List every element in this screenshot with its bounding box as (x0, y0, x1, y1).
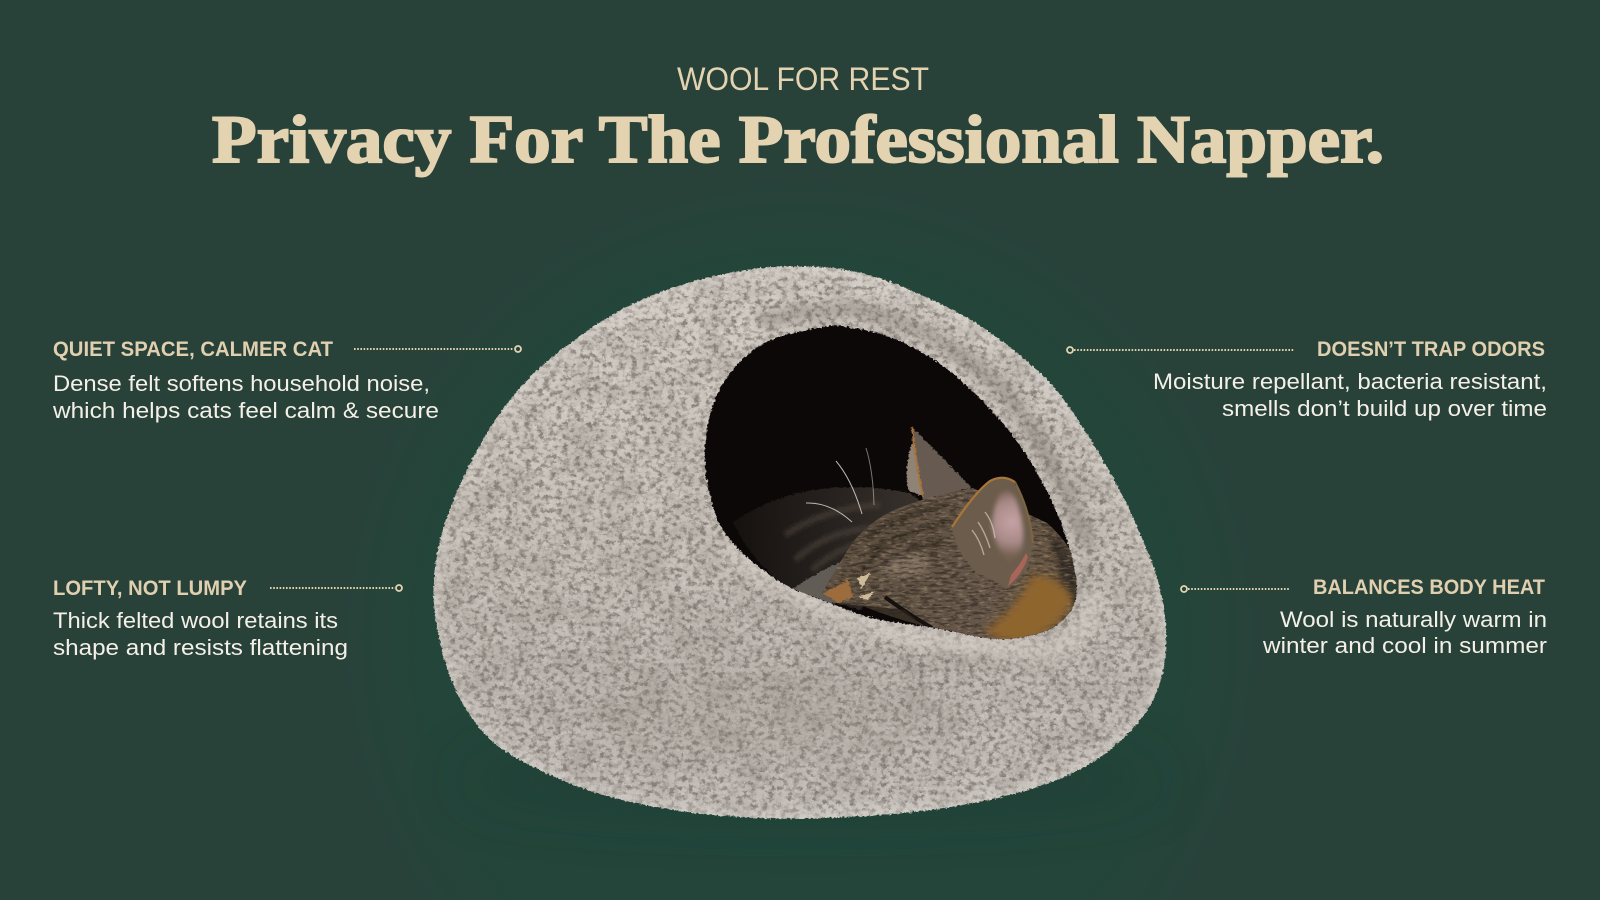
callout heading: DOESN’T TRAP ODORS (1317, 338, 1545, 361)
far ear (907, 427, 972, 500)
callout: body heat (1181, 576, 1547, 658)
heading block (212, 61, 1384, 177)
leader line (354, 346, 521, 352)
callout text (53, 608, 348, 660)
callout: lofty (53, 577, 402, 660)
callout text (52, 371, 439, 423)
callout: quiet space (52, 338, 521, 423)
callout text (1262, 607, 1547, 658)
cave opening (705, 326, 1077, 639)
callout heading: QUIET SPACE, CALMER CAT (53, 338, 333, 361)
callout text: Thick felted wool retains its (53, 608, 338, 633)
felt shell (420, 255, 1180, 830)
callout text: winter and cool in summer (1262, 633, 1547, 658)
eyebrow: WOOL FOR REST (677, 61, 929, 97)
callout text: Wool is naturally warm in (1280, 607, 1547, 632)
callout heading: LOFTY, NOT LUMPY (53, 577, 247, 600)
callout text: shape and resists flattening (53, 635, 348, 660)
cat head and neck (822, 488, 1076, 640)
cat body (733, 486, 920, 610)
callout text: which helps cats feel calm & secure (52, 398, 439, 423)
felt cat cave (420, 255, 1180, 830)
orange neck fur (985, 575, 1072, 642)
whiskers (806, 448, 874, 522)
leader line (1181, 586, 1289, 592)
near ear (952, 478, 1033, 588)
callout text: Moisture repellant, bacteria resistant, (1153, 369, 1547, 394)
callout text (1153, 369, 1547, 421)
title: Privacy For The Professional Napper. (212, 101, 1384, 177)
callout heading: BALANCES BODY HEAT (1313, 576, 1545, 599)
callout: odors (1067, 338, 1547, 421)
callout text: smells don’t build up over time (1222, 396, 1547, 421)
floor shadow (460, 748, 1160, 812)
leader line (1067, 347, 1294, 353)
callout text: Dense felt softens household noise, (53, 371, 430, 396)
leader line (270, 585, 402, 591)
sleeping tabby cat (733, 427, 1090, 650)
